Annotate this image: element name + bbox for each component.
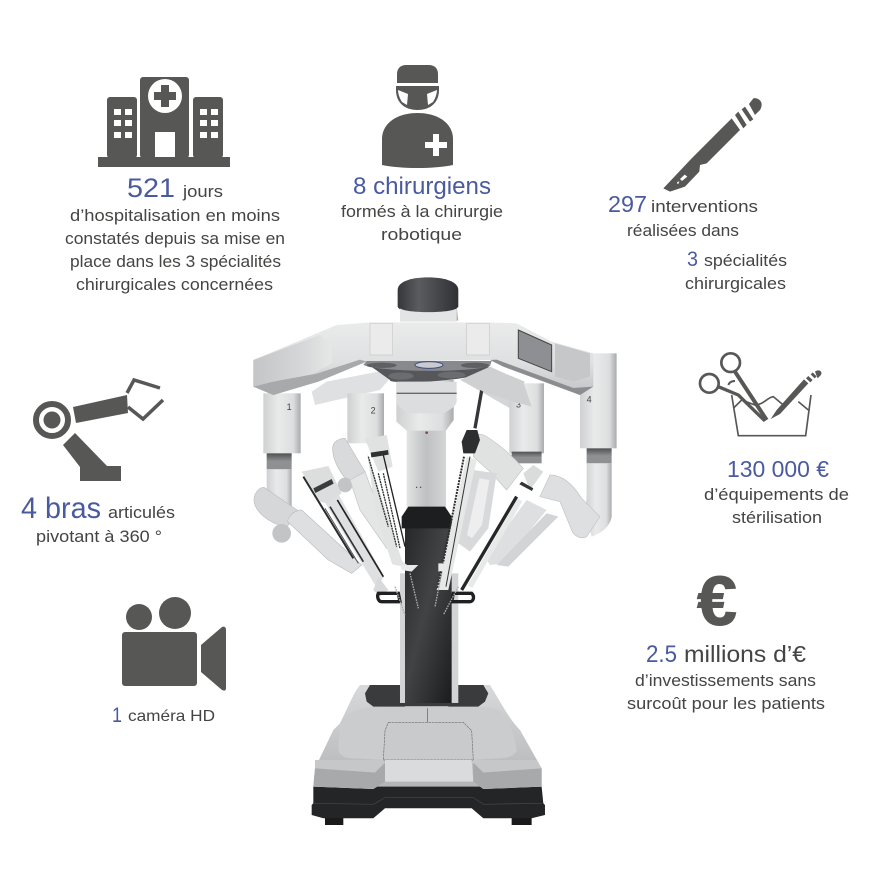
text: 521 jours: constatés depuis sa mise en xyxy=(65,229,285,248)
icon: video camera xyxy=(122,597,226,691)
text: 1 caméra HD: 1 xyxy=(112,704,122,727)
text: 297 interventions: spécialités xyxy=(704,251,787,270)
robot central column xyxy=(396,380,458,703)
icon: surgeon xyxy=(382,65,453,168)
robot illustration xyxy=(253,277,617,825)
text: 130 000 euros: d’équipements de xyxy=(704,485,849,504)
text: 2.5 millions xyxy=(627,641,825,713)
text: 521 jours: chirurgicales concernées xyxy=(76,275,273,294)
robot rear supports and pillars xyxy=(263,353,617,537)
text: 8 chirurgiens: 8 chirurgiens xyxy=(353,173,491,200)
robot rear supports and pillars: 1 xyxy=(287,402,292,412)
text: 8 chirurgiens xyxy=(341,173,503,244)
text: 4 bras articulés: articulés xyxy=(108,503,175,522)
text: 297 interventions: chirurgicales xyxy=(685,274,786,293)
text: 521 jours: jours xyxy=(182,183,223,201)
robot rear supports and pillars: 4 xyxy=(587,395,592,405)
robot rear supports and pillars: 3 xyxy=(516,399,521,409)
icon: robotic arm xyxy=(36,380,163,481)
text: 4 bras articulés: 4 bras xyxy=(21,492,101,525)
text: 521 jours: d’hospitalisation en moins xyxy=(70,206,280,225)
text: 1 caméra HD xyxy=(112,704,215,727)
icon: sterilisation basin xyxy=(700,353,821,436)
icon: scalpel xyxy=(663,98,762,192)
text: 4 bras articulés: pivotant à 360 ° xyxy=(36,527,162,546)
text: 2.5 millions: millions d’€ xyxy=(684,641,806,667)
text: 2.5 millions: 2.5 xyxy=(646,641,677,668)
text: 4 bras articulés xyxy=(21,492,175,546)
text: 130 000 euros: 130 000 € xyxy=(727,456,829,482)
text: 521 jours xyxy=(65,173,285,294)
icon: euro: € xyxy=(697,562,737,640)
text: 8 chirurgiens: formés à la chirurgie xyxy=(341,202,503,221)
icon: hospital xyxy=(98,77,230,167)
text: 521 jours: place dans les 3 spécialités xyxy=(70,252,281,271)
text: 297 interventions: réalisées dans xyxy=(627,221,739,240)
robot boom xyxy=(253,277,593,413)
text: 297 interventions: 297 xyxy=(608,191,647,217)
text: 2.5 millions: d’investissements sans xyxy=(635,671,816,690)
text: 297 interventions: 3 xyxy=(687,248,698,271)
text: 130 000 euros xyxy=(704,456,849,527)
robot left joints and instruments xyxy=(254,435,412,597)
text: 130 000 euros: stérilisation xyxy=(732,508,822,527)
robot right joints and instruments xyxy=(437,372,600,590)
text: 297 interventions: interventions xyxy=(651,197,758,216)
text: 1 caméra HD: caméra HD xyxy=(128,708,215,725)
text: 8 chirurgiens: robotique xyxy=(381,225,462,244)
robot rear supports and pillars: 2 xyxy=(371,405,376,415)
text: 2.5 millions: surcoût pour les patients xyxy=(627,694,825,713)
text: 521 jours: 521 xyxy=(127,173,175,203)
text: 297 interventions xyxy=(608,191,787,293)
robot base xyxy=(312,685,545,825)
robot lower tools and clamps xyxy=(378,563,473,615)
